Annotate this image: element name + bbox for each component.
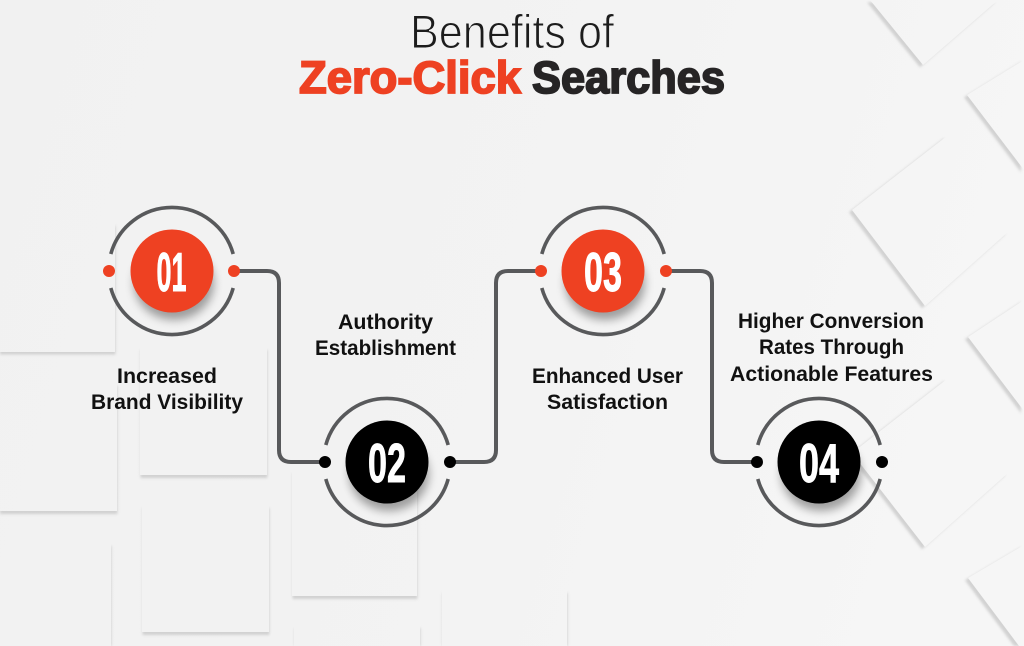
label: Increased Brand Visibility: Increased bbox=[117, 365, 217, 388]
label: Authority Establishment: Establishment bbox=[315, 337, 456, 360]
title line 2: red: Zero-Click bbox=[299, 52, 522, 103]
label: Higher Conversion Rates Through Actionable Features bbox=[730, 310, 933, 386]
step 03 node bbox=[535, 207, 672, 335]
title bbox=[299, 5, 725, 103]
connector line 02 to 03 bbox=[450, 271, 541, 462]
step 01 node: 01 bbox=[156, 241, 186, 303]
label: Higher Conversion Rates Through Actionable Features: Rates Through bbox=[759, 336, 904, 359]
step 03 node: 03 bbox=[584, 241, 622, 303]
label: Enhanced User Satisfaction: Enhanced User bbox=[532, 365, 683, 388]
label: Authority Establishment bbox=[315, 311, 456, 360]
label: Higher Conversion Rates Through Actionable Features: Actionable Features bbox=[730, 363, 933, 386]
label: Authority Establishment: Authority bbox=[338, 311, 433, 334]
connector line 03 to 04 bbox=[666, 271, 757, 462]
step 01 node bbox=[103, 207, 240, 335]
label: Increased Brand Visibility: Brand Visibility bbox=[91, 391, 243, 414]
title line 1: Benefits of bbox=[410, 5, 615, 58]
step 02 node bbox=[319, 398, 456, 526]
label: Higher Conversion Rates Through Actionable Features: Higher Conversion bbox=[738, 310, 924, 333]
step 04 node: 04 bbox=[799, 432, 839, 494]
step 02 node: 02 bbox=[368, 432, 406, 494]
label: Enhanced User Satisfaction bbox=[532, 365, 683, 414]
label: Enhanced User Satisfaction: Satisfaction bbox=[547, 391, 668, 414]
title line 2: dark: Searches bbox=[532, 52, 725, 103]
connector line 01 to 02 bbox=[234, 271, 325, 462]
step 04 node bbox=[751, 398, 888, 526]
label: Increased Brand Visibility bbox=[91, 365, 243, 414]
